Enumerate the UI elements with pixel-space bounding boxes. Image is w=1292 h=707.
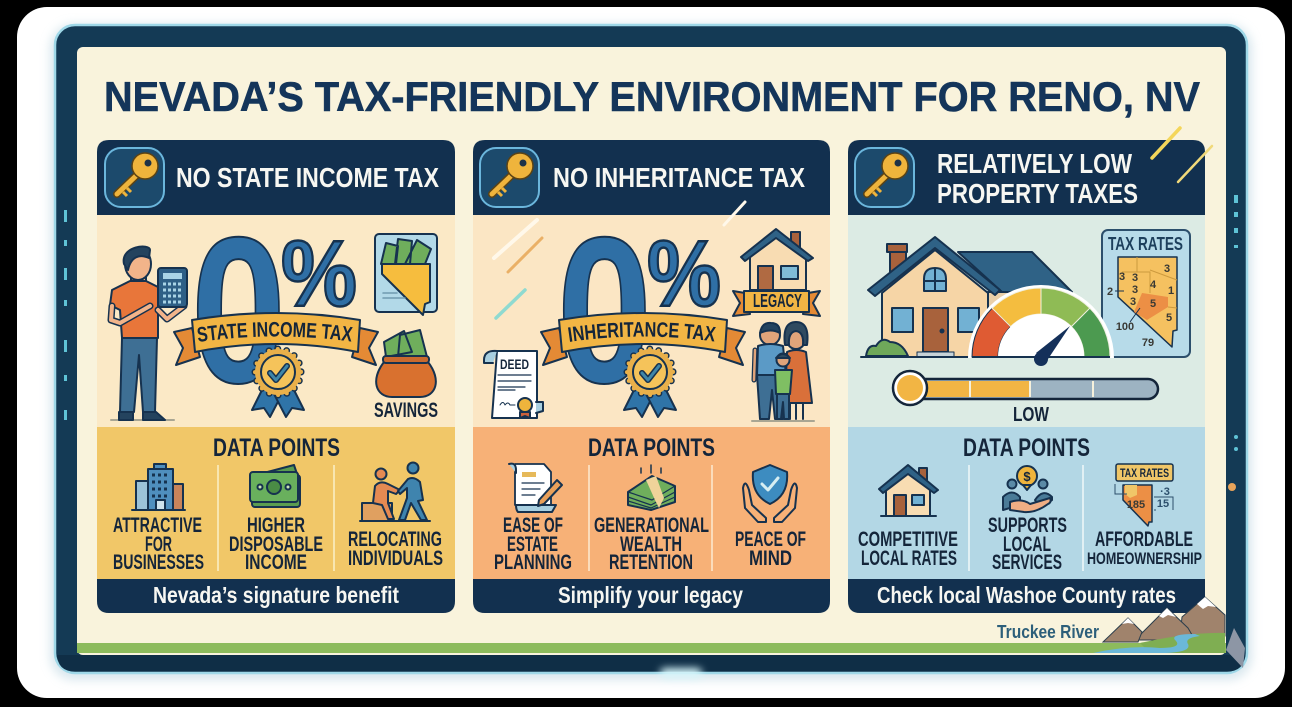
- streaks: [1152, 128, 1212, 182]
- map: tax rates: 79: [1142, 337, 1154, 349]
- panel: no state income tax: [97, 140, 455, 613]
- data point: competitive local rates: LOCAL RATES: [861, 547, 957, 570]
- data point: relocating individuals: [348, 528, 443, 570]
- panel: no inheritance tax: [473, 140, 830, 613]
- icon: cash: [250, 465, 300, 507]
- footer: Simplify your legacy: [558, 582, 743, 608]
- title: NEVADA’S TAX-FRIENDLY ENVIRONMENT FOR RENO, NV: [104, 73, 1200, 120]
- map: tax rates: 4: [1150, 279, 1157, 291]
- map: tax rates: 3: [1119, 271, 1125, 283]
- deed label: DEED: [500, 356, 529, 372]
- map: tax rates: 3: [1132, 284, 1138, 296]
- big 0% state income tax: [191, 195, 357, 427]
- ribbon: inheritance tax: [540, 312, 746, 366]
- panel: relatively low property taxes: [848, 128, 1212, 613]
- data point: affordable homeownership: [1087, 528, 1202, 568]
- panel 3 header: [848, 140, 1205, 215]
- data point: generational wealth retention: RETENTION: [609, 551, 693, 574]
- panel 1 header: NO STATE INCOME TAX: [176, 162, 439, 193]
- icon: seal: [252, 349, 304, 417]
- data point: ease of estate planning: [494, 514, 572, 574]
- data point: higher disposable income: [229, 514, 323, 574]
- data point: peace of mind: [735, 528, 806, 570]
- data point: competitive local rates: COMPETITIVE: [858, 528, 958, 551]
- data points heading: DATA POINTS: [588, 434, 715, 462]
- panel 3 backgrounds: [848, 215, 1205, 579]
- bottom glow: [660, 668, 702, 678]
- icon: small house: [879, 465, 938, 516]
- ribbon: state income tax: STATE INCOME TAX: [198, 322, 353, 342]
- icon: money stack: [628, 465, 675, 510]
- data point: peace of mind: MIND: [749, 547, 792, 570]
- icon: buildings: [132, 464, 185, 510]
- map: tax rates: 3: [1132, 272, 1138, 284]
- map: tax rates: 5: [1150, 298, 1156, 310]
- panel 2 header: NO INHERITANCE TAX: [553, 162, 805, 193]
- data point: higher disposable income: HIGHER: [247, 514, 305, 537]
- data point: affordable homeownership: HOMEOWNERSHIP: [1087, 549, 1202, 568]
- data point: generational wealth retention: WEALTH: [620, 533, 682, 556]
- big 0% inheritance tax: 0: [557, 195, 652, 427]
- savings label: SAVINGS: [374, 399, 438, 422]
- icon: seal: [624, 349, 676, 417]
- icon: family: [752, 322, 814, 421]
- data point: competitive local rates: [858, 528, 958, 570]
- icon: shield with hands: [743, 465, 797, 522]
- map: tax rates: 5: [1166, 312, 1172, 324]
- data point: attractive for businesses: BUSINESSES: [113, 551, 204, 574]
- data point: generational wealth retention: GENERATIONAL: [594, 514, 709, 537]
- data point: higher disposable income: INCOME: [245, 551, 307, 574]
- icon: nevada wallet card: [375, 234, 437, 315]
- data point: ease of estate planning: EASE OF: [503, 514, 563, 537]
- data point: relocating individuals: RELOCATING: [348, 528, 442, 551]
- data point: generational wealth retention: [594, 514, 709, 574]
- icon: affordable homeownership tax rates: ·3: [1160, 486, 1170, 498]
- frame dots: [64, 195, 1238, 491]
- legacy label: LEGACY: [753, 291, 802, 311]
- data point: attractive for businesses: [113, 514, 204, 574]
- gauge: [968, 285, 1114, 366]
- dividers: [969, 465, 1083, 571]
- map: tax rates: 1: [1168, 285, 1174, 297]
- footer: Nevada’s signature benefit: [153, 582, 399, 608]
- data point: ease of estate planning: PLANNING: [494, 551, 572, 574]
- footer: Check local Washoe County rates: [877, 582, 1176, 608]
- icon: estate document: [509, 464, 562, 512]
- data point: higher disposable income: DISPOSABLE: [229, 533, 323, 556]
- panel 2 backgrounds: [473, 215, 830, 579]
- panel 2 header: [473, 140, 830, 215]
- icon: affordable homeownership tax rates: [1115, 464, 1173, 526]
- icon: deed: [484, 351, 543, 418]
- data point: relocating individuals: INDIVIDUALS: [348, 547, 443, 570]
- icon: savings pot: [376, 330, 436, 397]
- icon: affordable homeownership tax rates: TAX RATES: [1120, 466, 1169, 480]
- dollar sign: $: [1023, 469, 1031, 484]
- footer: [97, 579, 455, 613]
- map: tax rates: [1102, 230, 1190, 357]
- data point: supports local services: SERVICES: [992, 551, 1062, 574]
- panel 3 header: RELATIVELY LOW: [937, 148, 1132, 179]
- data point: peace of mind: PEACE OF: [735, 528, 806, 551]
- footer: [473, 579, 830, 613]
- map: tax rates: 3: [1164, 263, 1170, 275]
- ribbon: inheritance tax: INHERITANCE TAX: [568, 322, 716, 342]
- map: tax rates: 100: [1116, 321, 1134, 333]
- data points heading: DATA POINTS: [213, 434, 340, 462]
- truckee river label: Truckee River: [997, 622, 1099, 642]
- frame corner accent: [1226, 628, 1245, 668]
- data point: attractive for businesses: FOR: [145, 533, 172, 556]
- data point: attractive for businesses: ATTRACTIVE: [113, 514, 202, 537]
- low label: LOW: [1013, 404, 1049, 426]
- ribbon: state income tax: [173, 312, 379, 366]
- icon: supports local services: [1003, 466, 1052, 512]
- data point: supports local services: SUPPORTS: [988, 514, 1067, 537]
- streaks: [494, 202, 745, 318]
- slider: low: [893, 371, 1158, 405]
- dividers: [218, 465, 334, 571]
- map: tax rates: 3: [1130, 296, 1136, 308]
- panel 1 header: [97, 140, 455, 215]
- icon: affordable homeownership tax rates: 15: [1157, 498, 1169, 510]
- data point: ease of estate planning: ESTATE: [507, 533, 558, 556]
- icon: mountains and river: [1093, 597, 1225, 653]
- big 0% inheritance tax: %: [647, 221, 721, 326]
- icon: legacy house: [733, 229, 820, 316]
- map: tax rates: 2: [1107, 286, 1113, 298]
- data point: affordable homeownership: AFFORDABLE: [1095, 528, 1193, 551]
- panel 1 backgrounds: [97, 215, 455, 579]
- big 0% state income tax: %: [281, 221, 357, 326]
- icon: relocating people: [360, 462, 430, 521]
- icon: house: [861, 237, 1072, 357]
- data point: supports local services: LOCAL: [1003, 533, 1051, 556]
- map: tax rates: TAX RATES: [1108, 234, 1183, 254]
- dividers: [589, 465, 712, 571]
- footer: [848, 579, 1205, 613]
- data points heading: DATA POINTS: [963, 434, 1090, 462]
- icon: affordable homeownership tax rates: 185: [1127, 499, 1145, 511]
- big 0% state income tax: 0: [191, 195, 286, 427]
- panel 3 header: PROPERTY TAXES: [937, 178, 1138, 209]
- data point: supports local services: [988, 514, 1067, 574]
- icon: person with calculator: [110, 247, 187, 420]
